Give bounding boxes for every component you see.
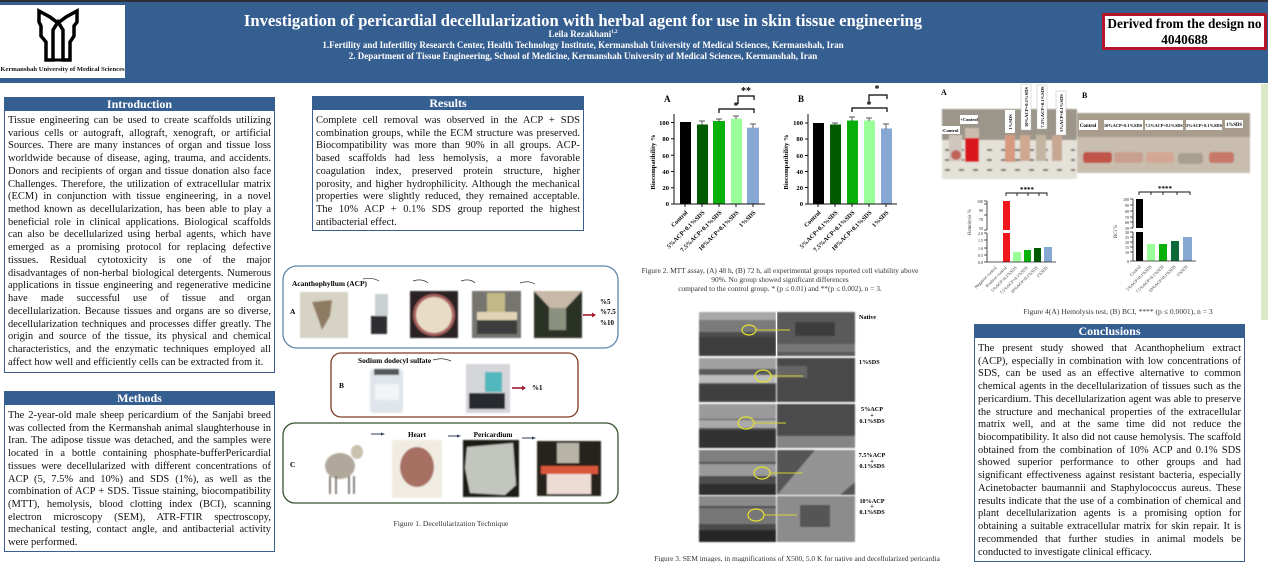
heading: methods (5, 392, 274, 405)
bar chart A: Biocompatibility % (650, 134, 657, 190)
panel A: ACP extraction: Acanthophyllum (ACP) (292, 279, 367, 288)
SEM row: native (699, 312, 876, 542)
results text: Biocompatibility was more than 90% in all groups. ACP- (316, 140, 580, 151)
conclusions text: showed superior performance to other groups and had (978, 457, 1241, 468)
conclusions text: obtained from the combination of 10% ACP and 0.1% SDS (978, 445, 1241, 456)
bar chart: BCI: 90 (1125, 203, 1129, 208)
methods text: mechanical testing, contact angle, and antibacterial activity (8, 524, 271, 535)
SEM row: 7.5% ACP: 7.5%ACP (859, 452, 886, 459)
bar chart: hemolysis: 5%ACP+0.1%SDS (990, 265, 1018, 293)
bar chart A: 7.5%ACP+0.1%SDS (679, 209, 724, 254)
methods text: electron microscopy (SEM), ATR-FTIR spectroscopy, (8, 512, 271, 523)
design number callout: 4040688 (1161, 32, 1208, 47)
introduction text: decellularization. Because tissues and organs are so diverse, (8, 306, 271, 317)
photo A: hemolysis tubes (941, 84, 1077, 179)
figure 3: SEM images (654, 312, 941, 562)
bar chart B: 100 (793, 120, 804, 127)
bar chart: BCI: 15 (1125, 245, 1129, 250)
introduction text: decellularization techniques and processes differ greatly. The (8, 318, 271, 330)
heading: conclusions (975, 325, 1244, 338)
figure 4: hemolysis and BCI (941, 84, 1250, 316)
bar chart B: Control (803, 209, 823, 229)
bar chart: hemolysis: 7.5%ACP+0.1%SDS (999, 265, 1029, 295)
bar chart: BCI: 1%SDS (1175, 264, 1189, 278)
photo A: hemolysis tubes: A (941, 88, 947, 97)
header band (0, 0, 1268, 83)
SEM row: 5% ACP: 5%ACP (861, 406, 883, 413)
results text: based scaffolds had less hemolysis, a more favorable (316, 153, 580, 164)
bar chart: hemolysis: 70 (979, 217, 983, 222)
introduction text (8, 115, 271, 368)
introduction text: Sources. There are many instances of organ and tissue loss (8, 140, 271, 151)
conclusions text: The present study showed that Acanthophelium extract (978, 343, 1241, 354)
figure 1: decellularization technique (283, 266, 618, 528)
photo A: hemolysis tubes: -Control (942, 128, 959, 133)
panel A: ACP extraction (283, 266, 618, 348)
panel: methods (4, 391, 275, 552)
SEM row: 5% ACP (699, 404, 885, 448)
bar chart: BCI: 70 (1125, 215, 1129, 220)
authors and affiliations: Leila Rezakhani1,2 (548, 29, 618, 39)
results text (316, 115, 580, 228)
SEM row: 7.5% ACP: 0.1%SDS (859, 463, 885, 470)
bar chart: BCI: 60 (1125, 220, 1129, 225)
photo B: clotting index samples: B (1082, 91, 1088, 100)
bar chart: BCI: 20 (1125, 240, 1129, 245)
panel B: sodium dodecyl sulfate: %1 (532, 384, 543, 392)
SEM row: 10% ACP: + (870, 503, 874, 510)
methods text: were performed. (8, 537, 77, 548)
conclusions text: plant decellularization agents is a promising option for (978, 508, 1241, 519)
figure 1 caption: Figure 1. Decellularization Technique (394, 519, 509, 528)
bar chart B: 5%ACP+0.1%SDS (799, 209, 840, 250)
heading: conclusions: Conclusions (1078, 324, 1141, 338)
methods text: Iran. The adipose tissue was detached, and the samples were (8, 435, 271, 446)
introduction text: emerged as a promising protocol for replacing defective (8, 242, 271, 253)
photo A: hemolysis tubes: 1%SDS (1008, 114, 1013, 130)
conclusions text: chemical agents in the decellularization of tissues such as the (978, 381, 1241, 392)
panel: results (312, 96, 584, 231)
conclusions text: the structure and mechanical properties of the extracellular (978, 407, 1241, 418)
figure 2 caption: 90%. No group showed significant differences (711, 275, 849, 284)
panel B: sodium dodecyl sulfate: Sodium dodecyl sulfate (358, 356, 432, 365)
figure 2 caption: compared to the control group. * (p ≤ 0.01) and **(p ≤ 0.002), n = 3. (678, 284, 882, 293)
conclusions text: pericardium. This decellularization agent was able to preserve (978, 394, 1241, 405)
photo A: hemolysis tubes: +Control (960, 117, 979, 122)
SEM row: 7.5% ACP (699, 450, 886, 495)
photo A: hemolysis tubes: 7.5%ACP+0.1%SDS (1040, 86, 1045, 128)
results text: antibacterial effect. (316, 217, 397, 228)
heading: introduction (5, 98, 274, 111)
conclusions text: obtaining a suitable extracellular matrix for skin repair. It is (978, 521, 1241, 532)
bar chart B: * (874, 84, 880, 95)
bar chart: BCI: 10%ACP+0.1%SDS (1148, 264, 1177, 293)
introduction text: affect how well and efficiently cells can be extracted from it. (8, 357, 263, 368)
bar chart A: * (734, 101, 738, 112)
bar chart A: 0 (666, 201, 670, 208)
bar chart: BCI (1114, 185, 1196, 294)
bar chart A: A (664, 94, 671, 104)
SEM row: 5% ACP: + (870, 412, 874, 419)
figure 4 caption: Figure 4(A) Hemolysis test, (B) BCI, **** (p ≤ 0.0001), n = 3 (1023, 307, 1213, 316)
pale green edge strip (1261, 84, 1268, 320)
bar chart A: 80 (662, 136, 670, 143)
bar chart: BCI: 100 (1123, 197, 1129, 202)
panel A: ACP extraction: %5 (600, 298, 611, 306)
SEM row: 7.5% ACP: + (870, 458, 874, 465)
SEM row: 1% SDS (699, 358, 880, 402)
design number callout (1102, 13, 1267, 50)
panel: conclusions (974, 324, 1245, 562)
panel A: ACP extraction: %7.5 (600, 308, 616, 316)
bar chart B: B (798, 94, 804, 104)
figure 2 caption: Figure 2. MTT assay, (A) 48 h, (B) 72 h, all experimental groups reported cell viability above (642, 266, 919, 275)
results text: coagulation index, preserved protein structure, higher (316, 166, 580, 177)
photo B: clotting index samples (1077, 91, 1250, 173)
bar chart B: 7.5%ACP+0.1%SDS (812, 209, 857, 254)
bar chart A: 20 (662, 185, 670, 192)
panel B: sodium dodecyl sulfate: B (339, 381, 344, 390)
results text: combination groups, while the ECM structure was preserved. (316, 128, 580, 139)
methods text: The 2-year-old male sheep pericardium of the Sanjabi breed (8, 410, 271, 421)
SEM row: 10% ACP: 10%ACP (859, 498, 885, 505)
bar chart A: 10%ACP+0.1%SDS (697, 209, 741, 253)
introduction text: tissues. Residual cytotoxicity is one of the major (8, 255, 271, 266)
photo B: clotting index samples: 5%ACP+0.1%SDS (1186, 123, 1223, 128)
bar chart: hemolysis (968, 186, 1056, 295)
conclusions text: results indicate that the use of a combination of chemical and (978, 496, 1241, 507)
SEM row: 10% ACP (699, 496, 885, 542)
introduction text: disadvantages of non-herbal biological detergents. Numerous (8, 268, 271, 279)
authors and affiliations: 1.Fertility and Infertility Research Center, Health Technology Institute, Kermanshah University of Medical Sciences, Kermanshah, Iran (322, 40, 844, 50)
introduction text: (ECM) in conjunction with tissue engineering, in a novel (8, 191, 271, 202)
methods text (8, 410, 271, 548)
logo panel (0, 5, 125, 78)
methods text: was collected from the Kermanshah animal slaughterhouse in (8, 423, 271, 434)
bar chart A: ** (741, 86, 751, 97)
conclusions text: recommended that further studies in animal models be (978, 534, 1241, 545)
introduction text: Donors and recipients of organ and tissue donation also face (8, 166, 271, 177)
bar chart: BCI: 25 (1125, 235, 1129, 240)
introduction text: have made successful use of tissue and organ (8, 293, 271, 304)
SEM row: 5% ACP: 0.1%SDS (859, 418, 885, 425)
bar chart: BCI: **** (1158, 185, 1172, 193)
results text: properties were slightly reduced, they remained acceptable. (316, 191, 580, 202)
conclusions text (978, 343, 1241, 558)
introduction text: various cells or autograft, allograft, xenograft, or artificial (8, 128, 271, 139)
bar chart: hemolysis: 0.0 (978, 260, 983, 265)
bar chart B: 20 (796, 185, 804, 192)
bar chart: BCI: 7.5%ACP+0.1%SDS (1135, 264, 1165, 294)
methods text: combination of ACP + SDS. Tissue staining, biocompatibility (8, 486, 271, 497)
panel C: tissue source: C (290, 460, 295, 469)
bar chart A: Control (670, 209, 690, 229)
introduction text: applications in tissue engineering and regenerative medicine (8, 280, 271, 291)
conclusions text: (ACP), especially in combination with low concentrations of (978, 356, 1241, 367)
bar chart: hemolysis: 1.5 (978, 238, 983, 243)
bar chart: hemolysis: 2.0 (978, 231, 983, 236)
panel A: ACP extraction: A (290, 307, 296, 316)
bar chart: BCI: BCI % (1114, 225, 1119, 238)
icon: university emblem (37, 8, 79, 62)
bar chart: hemolysis: 1.0 (978, 246, 983, 251)
logo caption: Kermanshah University of Medical Sciences (0, 66, 125, 73)
photo B: clotting index samples: 7.5%ACP+0.1%SDS (1145, 123, 1183, 128)
bar chart B: 10%ACP+0.1%SDS (830, 209, 874, 253)
bar chart B: 1%SDS (871, 209, 891, 229)
bar chart: BCI: 5%ACP+0.1%SDS (1125, 264, 1153, 292)
bar chart: hemolysis: Positive control (985, 265, 1008, 288)
methods text: (MTT), hemolysis, blood clotting index (BCI), scanning (8, 499, 271, 510)
heading: results (313, 97, 583, 110)
bar chart B: * (866, 100, 872, 111)
bar chart: hemolysis: 0.5 (978, 253, 983, 258)
conclusions text: conducted to investigate clinical efficacy. (978, 546, 1152, 558)
results text: porosity, and higher hydrophilicity. Although the mechanical (316, 179, 580, 190)
panel C: tissue source: Heart (408, 431, 427, 439)
introduction text: Tissue engineering can be used to create scaffolds utilizing (8, 115, 271, 126)
heading: results: Results (429, 96, 467, 110)
bar chart A: 1%SDS (738, 209, 758, 229)
title: Investigation of pericardial decellularization with herbal agent for use in skin tissue engineering (244, 11, 922, 30)
SEM row: 1% SDS: 1%SDS (859, 359, 880, 366)
SEM row: native: Native (859, 314, 876, 321)
bar chart B: 0 (800, 201, 804, 208)
bar chart: hemolysis: Negative control (973, 265, 998, 289)
bar chart B: Biocompatibility % (783, 134, 790, 190)
conclusions text: biocompatibility. It also did not cause hemolysis. The scaffold (978, 432, 1241, 443)
bar chart: hemolysis: Hemolysis % (968, 209, 973, 235)
bar chart: hemolysis: 50 (979, 226, 983, 231)
panel B: sodium dodecyl sulfate (331, 353, 578, 417)
bar chart B: 60 (796, 153, 804, 160)
introduction text: Challenges. Therefore, the utilization of extracellular matrix (8, 179, 271, 190)
bar chart: BCI: 10 (1125, 250, 1129, 255)
conclusions text: matrix well, and at the same time did not reduce the (978, 419, 1241, 430)
panel A: ACP extraction: %10 (600, 319, 614, 327)
bar chart B: 80 (796, 136, 804, 143)
conclusions text: Acinetobacter baumannii and Staphylococcus aureus. These (978, 483, 1241, 494)
bar chart: BCI: 30 (1125, 230, 1129, 235)
photo B: clotting index samples: 1%SDS (1226, 123, 1242, 128)
bar chart: hemolysis: 90 (979, 208, 983, 213)
photo B: clotting index samples: Control (1080, 124, 1097, 129)
panel C: tissue source: Pericardium (474, 431, 512, 439)
introduction text: characteristics, and the enzymatic techniques employed all (8, 344, 271, 355)
bar chart A: 40 (662, 169, 670, 176)
design number callout: Derived from the design no (1107, 16, 1262, 31)
heading: methods: Methods (117, 391, 162, 405)
bar chart B: 40 (796, 169, 804, 176)
authors and affiliations (322, 29, 844, 61)
photo B: clotting index samples: 10%ACP+0.1%SDS (1104, 123, 1143, 128)
panel: introduction (4, 97, 275, 373)
bar chart: hemolysis: **** (1020, 186, 1034, 194)
bar chart A: 5%ACP+0.1%SDS (666, 209, 707, 250)
introduction text: can also be decellularized using herbal agents, which have (8, 229, 271, 240)
figure 2: biocompatibility bar charts (642, 84, 919, 293)
introduction text: origin and source of the tissue, its physical and chemical (8, 331, 271, 342)
heading: introduction: Introduction (107, 97, 172, 111)
panel C: tissue source (283, 423, 618, 503)
bar chart: BCI: Control (1129, 264, 1142, 277)
results text: Complete cell removal was observed in the ACP + SDS (316, 115, 580, 126)
results text: The 10% ACP + 0.1% SDS group reported the highest (316, 204, 580, 215)
bar chart A (650, 86, 765, 254)
bar chart: hemolysis: 100 (977, 199, 983, 204)
bar chart B (783, 84, 897, 254)
methods text: ACP (5, 7.5% and 10%) and SDS (1%), as well as the (8, 474, 271, 485)
photo A: hemolysis tubes: 5%ACP+0.1%SDS (1059, 94, 1064, 132)
bar chart: hemolysis: 10%ACP+0.1%SDS (1010, 265, 1039, 294)
introduction text: method known as decellularization, has been able to play a (8, 204, 271, 215)
bar chart A: 100 (659, 120, 670, 127)
bar chart: BCI: 50 (1125, 226, 1129, 231)
authors and affiliations: 2. Department of Tissue Engineering, School of Medicine, Kermanshah University of Medical Sciences, Kermanshah, Iran (349, 51, 817, 61)
methods text: located in a bottle containing phosphate-bufferPericardial (8, 448, 271, 459)
conclusions text: SDS, can be used as an effective alternative to common (978, 368, 1241, 379)
bar chart A: 60 (662, 153, 670, 160)
bar chart: BCI: 0 (1127, 259, 1129, 264)
introduction text: beneficial role in clinical applications. Biological scaffolds (8, 217, 271, 228)
bar chart: BCI: 80 (1125, 209, 1129, 214)
SEM row: 10% ACP: 0.1%SDS (859, 509, 885, 516)
methods text: tissues were decellularized with different concentrations of (8, 461, 271, 472)
conclusions text: significant effectiveness against resistant bacteria, especially (978, 470, 1241, 481)
introduction text: worldwide because of disease, aging, trauma, and accidents. (8, 153, 271, 164)
bar chart: hemolysis: 1%SDS (1035, 265, 1049, 279)
photo A: hemolysis tubes: 10%ACP+0.1%SDS (1024, 87, 1029, 127)
